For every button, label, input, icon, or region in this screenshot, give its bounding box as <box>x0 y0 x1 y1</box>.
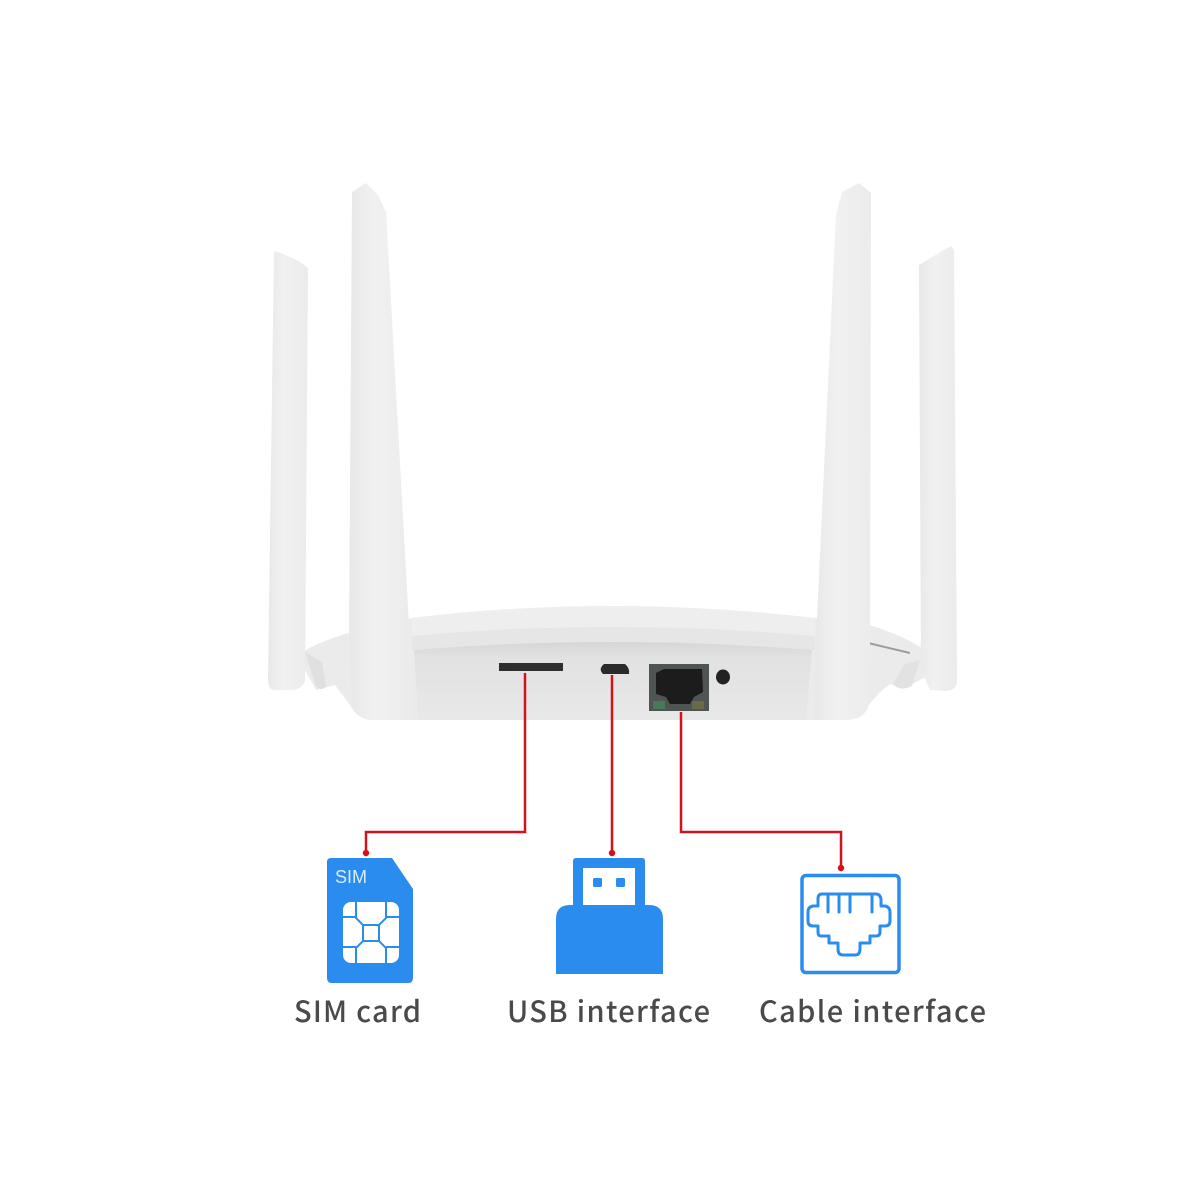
router <box>268 183 957 720</box>
connector: USB interface <box>610 675 614 855</box>
icon: SIM card: SIM <box>335 867 367 887</box>
label: SIM card: SIM card <box>294 989 421 1031</box>
antenna: inner right <box>815 183 871 720</box>
router body <box>303 606 935 720</box>
antenna: far left <box>268 251 308 690</box>
label: USB interface: USB interface <box>507 989 710 1031</box>
port: ethernet <box>649 664 709 711</box>
antenna: inner left <box>349 183 414 720</box>
connector: cable interface <box>681 712 843 870</box>
icon: cable interface <box>802 876 899 972</box>
antenna: far right <box>919 246 957 691</box>
label: Cable interface: Cable interface <box>759 989 986 1031</box>
reset button <box>716 670 730 684</box>
icon: USB interface <box>556 858 663 974</box>
icon: SIM card <box>327 858 413 983</box>
port: micro USB <box>601 664 629 674</box>
connector: SIM card <box>364 673 525 855</box>
port: SIM slot <box>499 663 563 671</box>
